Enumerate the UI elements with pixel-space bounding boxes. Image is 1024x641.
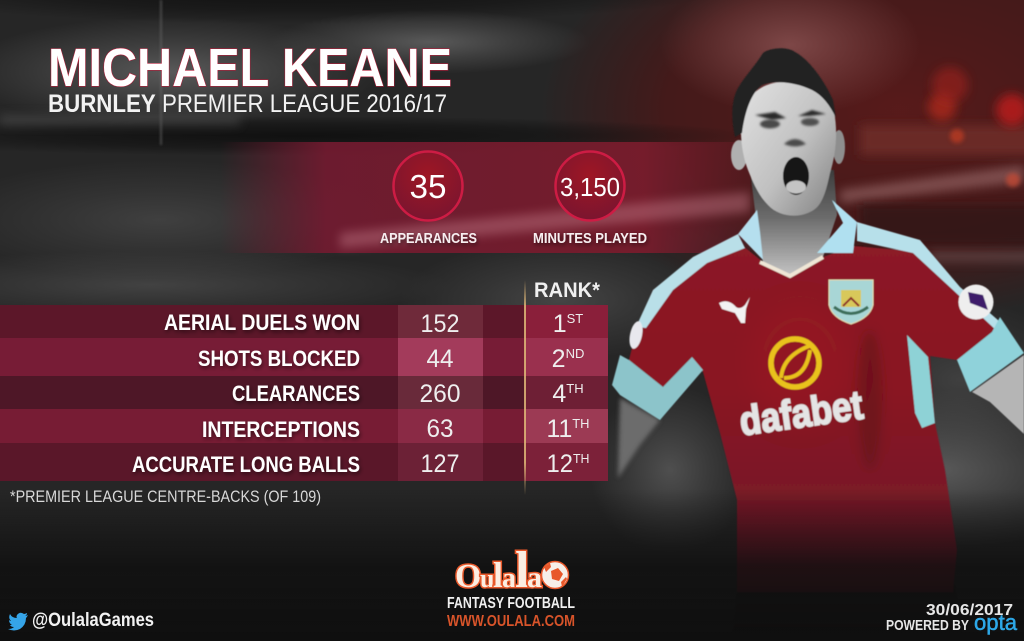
icon: twitter bird xyxy=(8,613,28,630)
row: accurate long balls: 12 xyxy=(546,450,574,478)
subtitle: BURNLEY PREMIER LEAGUE 2016/17 xyxy=(48,90,447,118)
row: shots blocked: ND xyxy=(566,346,584,361)
eyes xyxy=(760,120,780,128)
website: WWW.OULALA.COM xyxy=(447,613,575,630)
powered by opta: POWERED BY xyxy=(886,617,969,634)
oulala logo: O xyxy=(455,558,481,595)
left shoulder stripe xyxy=(636,234,745,328)
row: accurate long balls: ACCURATE LONG BALLS xyxy=(132,452,360,477)
row: accurate long balls: 127 xyxy=(420,450,460,478)
row: clearances xyxy=(232,380,584,408)
rank column rule xyxy=(524,280,526,495)
row: shots blocked: 44 xyxy=(426,345,454,373)
powered by opta xyxy=(886,610,1018,635)
row: interceptions: INTERCEPTIONS xyxy=(202,417,360,442)
oulala logo xyxy=(455,542,568,599)
face xyxy=(741,82,836,216)
row: accurate long balls xyxy=(132,450,590,478)
collar right xyxy=(817,200,857,253)
appearances stat xyxy=(380,152,477,247)
row backgrounds xyxy=(0,305,608,481)
stats table xyxy=(0,280,608,495)
minutes played stat: 3,150 xyxy=(560,172,620,202)
dafabet wordmark: dafabet xyxy=(737,382,866,444)
row: aerial duels won: ST xyxy=(567,311,583,326)
ears xyxy=(731,140,747,170)
minutes played stat: MINUTES PLAYED xyxy=(533,231,647,247)
footnote: *PREMIER LEAGUE CENTRE-BACKS (OF 109) xyxy=(10,487,321,506)
row: interceptions: 11 xyxy=(546,415,572,443)
neck xyxy=(750,170,837,276)
dafabet logo xyxy=(771,339,819,387)
row: clearances: CLEARANCES xyxy=(232,381,360,406)
row: clearances: 260 xyxy=(420,380,460,408)
row: shots blocked xyxy=(198,345,584,373)
powered by opta: opta xyxy=(974,610,1018,635)
shirt xyxy=(629,246,1003,592)
icon: football xyxy=(542,562,568,588)
appearances stat: APPEARANCES xyxy=(380,231,477,247)
puma logo xyxy=(719,297,750,323)
player right arm xyxy=(972,355,1024,434)
hair xyxy=(732,48,836,137)
oulala logo: l xyxy=(493,555,503,595)
club crest xyxy=(829,280,873,324)
twitter handle: @OulalaGames xyxy=(32,610,154,631)
row: aerial duels won: AERIAL DUELS WON xyxy=(164,310,360,335)
row: clearances: TH xyxy=(566,381,584,396)
open mouth xyxy=(783,157,809,195)
shorts xyxy=(732,585,962,641)
left sleeve badge xyxy=(627,320,645,350)
minutes played stat xyxy=(533,152,647,247)
row: clearances: 4 xyxy=(552,380,566,408)
row: shots blocked: 2 xyxy=(552,345,566,373)
panel: season totals band xyxy=(220,142,750,253)
appearances stat: 35 xyxy=(410,168,446,205)
oulala logo: l xyxy=(515,542,529,599)
oulala logo: u xyxy=(480,564,494,593)
nose xyxy=(784,139,806,146)
row: interceptions: 63 xyxy=(426,415,454,443)
oulala logo: a xyxy=(527,561,542,594)
player left arm xyxy=(618,398,660,478)
left cuff xyxy=(612,355,703,420)
row: accurate long balls: TH xyxy=(573,451,590,466)
tongue xyxy=(786,180,806,194)
brand tagline: FANTASY FOOTBALL xyxy=(447,595,575,612)
row: aerial duels won: 152 xyxy=(420,310,460,338)
side panel xyxy=(907,335,935,428)
collar V trim xyxy=(760,257,823,276)
player photo cut-out xyxy=(612,48,1024,641)
date: 30/06/2017 xyxy=(926,602,1013,619)
oulala logo: a xyxy=(502,563,516,594)
row: interceptions: TH xyxy=(572,416,590,431)
eyebrows xyxy=(755,110,826,120)
collar left xyxy=(738,210,763,260)
right shoulder stripe xyxy=(857,222,1007,332)
row: aerial duels won: 1 xyxy=(553,310,567,338)
bottom fade over the scene xyxy=(0,490,1024,641)
premier league badge xyxy=(958,284,994,320)
row: interceptions xyxy=(202,415,590,443)
row: aerial duels won xyxy=(164,310,583,338)
right cuff xyxy=(957,317,1024,392)
title: MICHAEL KEANE xyxy=(48,38,452,98)
row: shots blocked: SHOTS BLOCKED xyxy=(198,346,360,371)
rank heading: RANK* xyxy=(534,279,601,302)
